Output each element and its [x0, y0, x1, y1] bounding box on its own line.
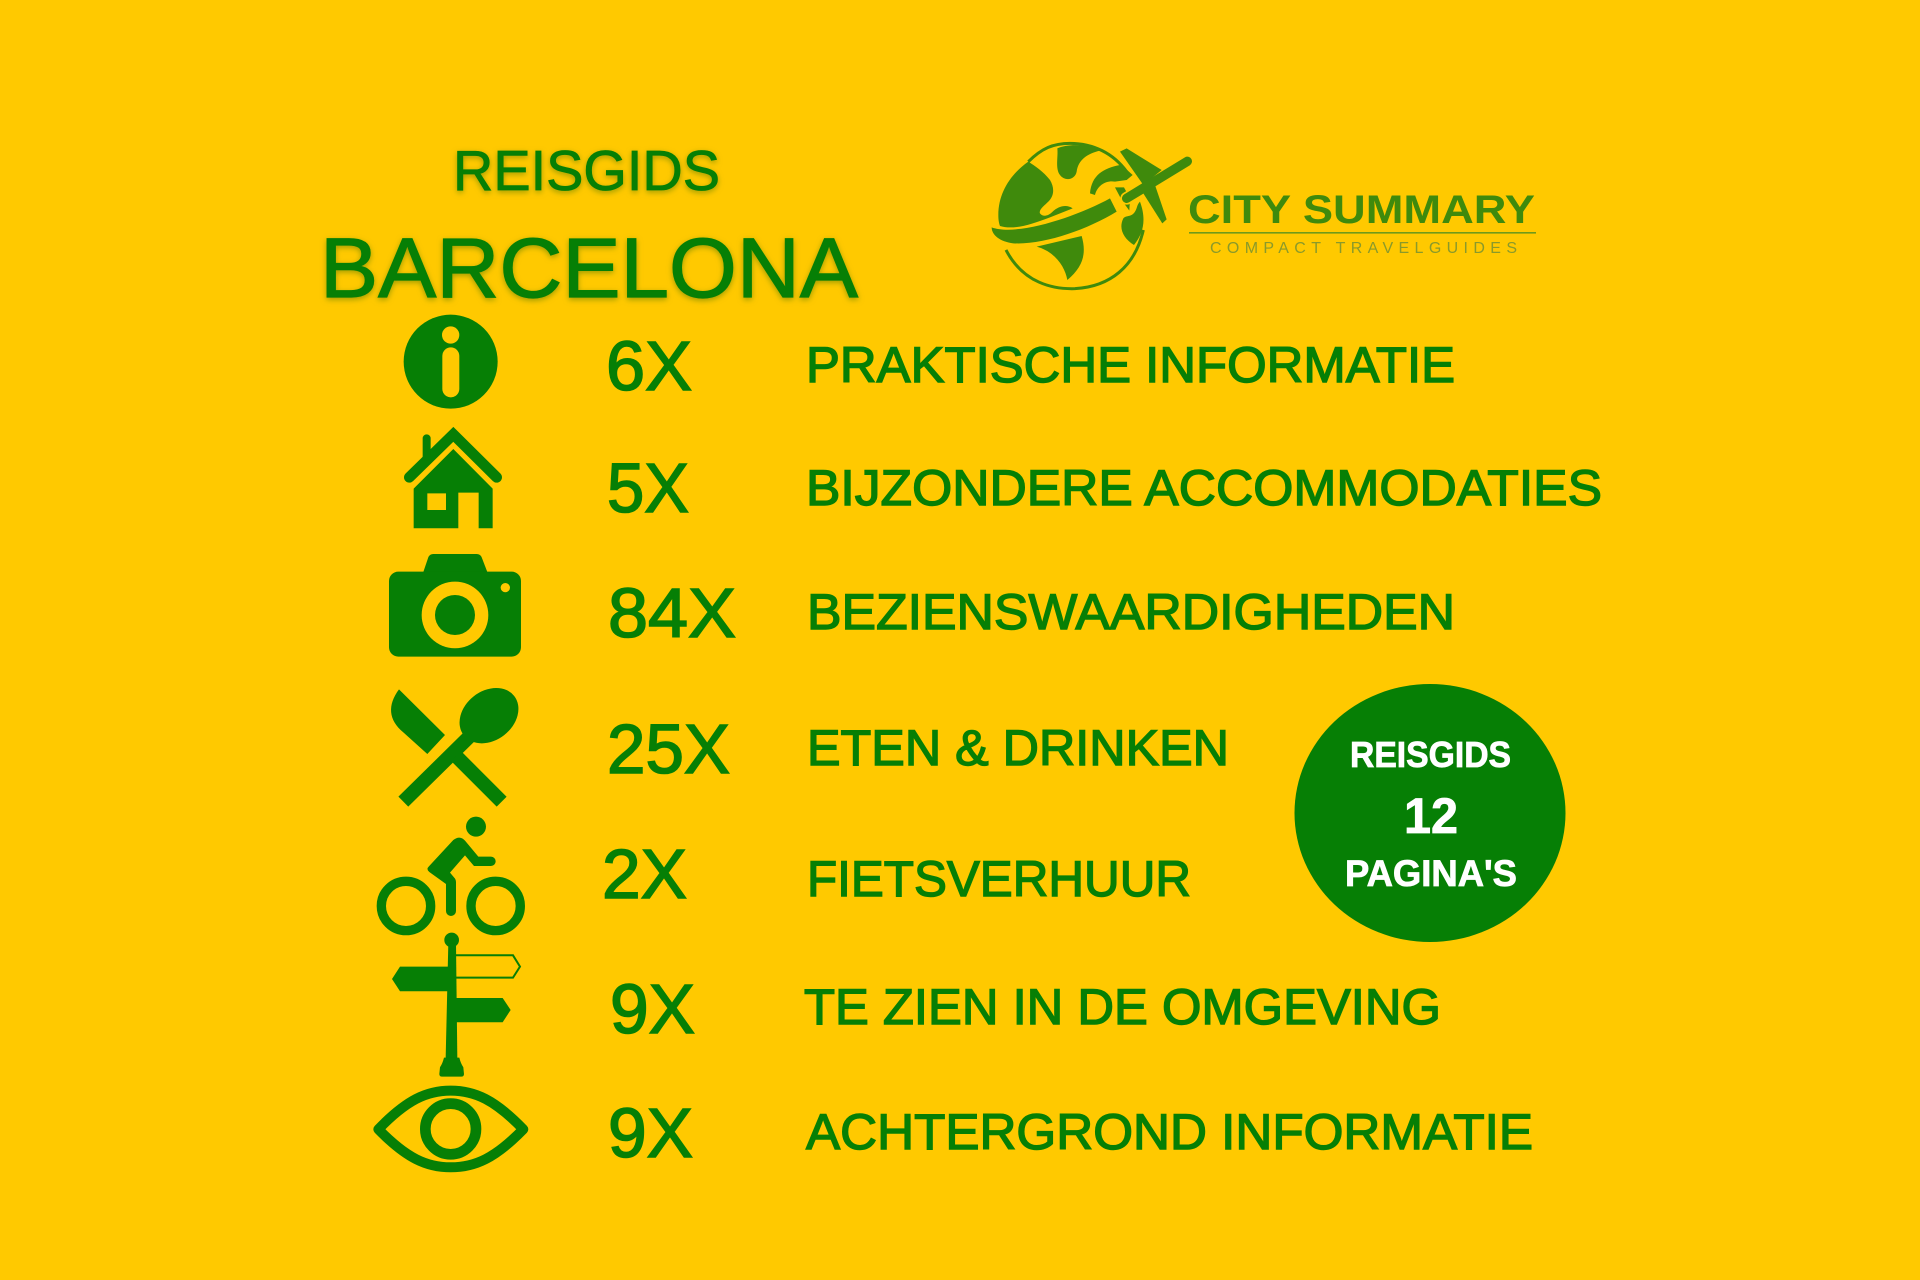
- logo: city summary: [992, 143, 1536, 289]
- icon: info: [404, 315, 498, 409]
- heading: barcelona: BARCELONA: [320, 221, 858, 315]
- logo wordmark: CITY SUMMARY: [1188, 188, 1535, 232]
- label: FIETSVERHUUR: [807, 851, 1191, 907]
- row: fietsverhuur: [381, 817, 1191, 931]
- count: 2X: [602, 835, 687, 913]
- count: 25X: [607, 710, 730, 788]
- count: 9X: [608, 1094, 693, 1172]
- icon: cyclist: [381, 817, 520, 931]
- icon: globe with plane: [992, 143, 1188, 289]
- row: te zien in de omgeving: [392, 933, 1441, 1077]
- badge text: reisgids: REISGIDS: [1350, 734, 1511, 775]
- label: PRAKTISCHE INFORMATIE: [806, 337, 1455, 393]
- row: bijzondere accommodaties: [409, 434, 1602, 528]
- logo rule: [1189, 232, 1536, 234]
- icon: camera: [389, 554, 521, 657]
- logo tagline: COMPACT TRAVELGUIDES: [1210, 240, 1517, 257]
- title block: [320, 139, 858, 315]
- heading: reisgids: REISGIDS: [453, 139, 720, 203]
- label: TE ZIEN IN DE OMGEVING: [804, 979, 1441, 1035]
- icon: signpost: [392, 933, 520, 1077]
- count: 84X: [608, 574, 736, 652]
- row: bezienswaardigheden: [389, 554, 1455, 657]
- row: praktische informatie: [404, 315, 1455, 409]
- badge number: 12: [1404, 788, 1458, 844]
- icon: house: [409, 434, 497, 528]
- badge circle: [1294, 684, 1566, 942]
- badge text: pagina's: PAGINA'S: [1345, 853, 1517, 894]
- icon: knife and spoon: [391, 677, 529, 802]
- count: 5X: [607, 449, 689, 527]
- row: achtergrond informatie: [378, 1091, 1533, 1172]
- label: BEZIENSWAARDIGHEDEN: [807, 584, 1455, 640]
- label: ETEN & DRINKEN: [807, 720, 1229, 776]
- count: 9X: [610, 970, 695, 1048]
- icon: eye: [378, 1091, 523, 1167]
- label: BIJZONDERE ACCOMMODATIES: [806, 460, 1602, 516]
- label: ACHTERGROND INFORMATIE: [806, 1104, 1533, 1160]
- count: 6X: [606, 327, 692, 405]
- row: eten en drinken: [391, 677, 1229, 802]
- callout: 12 pagina's badge: [1294, 684, 1566, 942]
